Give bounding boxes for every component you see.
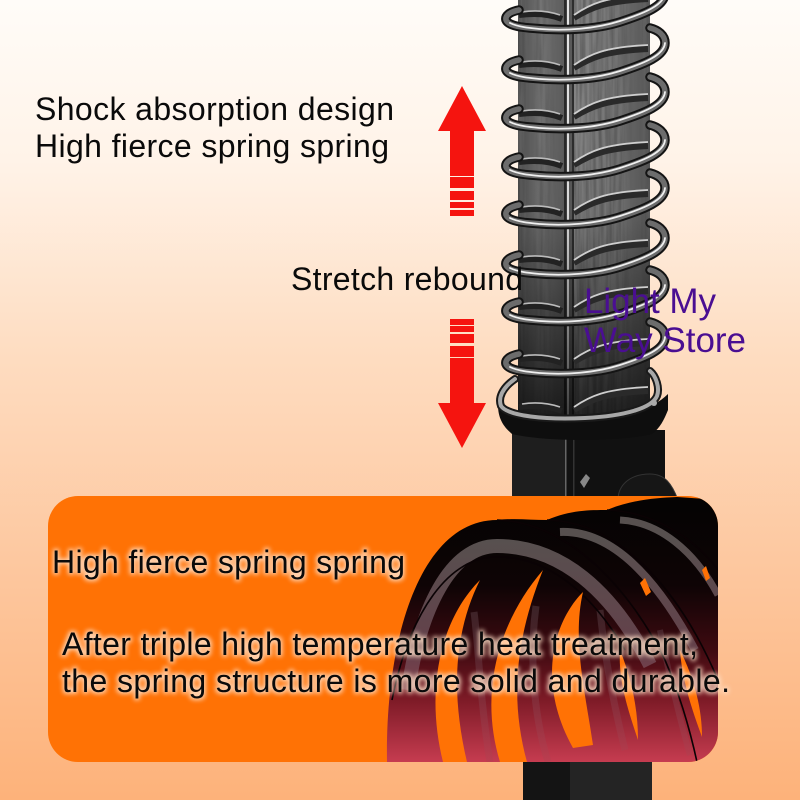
- steel post with spring coils: [498, 0, 678, 500]
- panel description: After triple high temperature heat treatment,: [62, 626, 698, 662]
- heading: shock absorption design: Shock absorption design: [35, 91, 394, 127]
- watermark: store name: Way Store: [584, 321, 746, 360]
- collar ring: [498, 371, 668, 440]
- panel description: the spring structure is more solid and durable.: [62, 663, 730, 699]
- panel description: [62, 626, 730, 699]
- coil outlines: [392, 510, 718, 762]
- arrow: up: [438, 86, 486, 216]
- post: black lower section: [512, 430, 678, 500]
- panel heading: High fierce spring spring: [52, 544, 405, 580]
- spring coils: [506, 0, 665, 374]
- label: stretch rebound: Stretch rebound: [291, 261, 523, 297]
- coil rim highlights: [408, 520, 718, 762]
- heading: shock absorption design: High fierce spring spring: [35, 128, 389, 164]
- post: steel upper section: [518, 0, 650, 425]
- arrow: down: [438, 319, 486, 448]
- watermark: store name: [584, 282, 746, 360]
- watermark: store name: Light My: [584, 282, 716, 321]
- heading: shock absorption design: [35, 91, 394, 164]
- lower post below panel: [523, 760, 652, 800]
- orange gaps between coils: [435, 566, 710, 762]
- panel: high fierce spring: [48, 496, 730, 762]
- image: black spring coils: [387, 497, 720, 762]
- panel background: [48, 496, 718, 762]
